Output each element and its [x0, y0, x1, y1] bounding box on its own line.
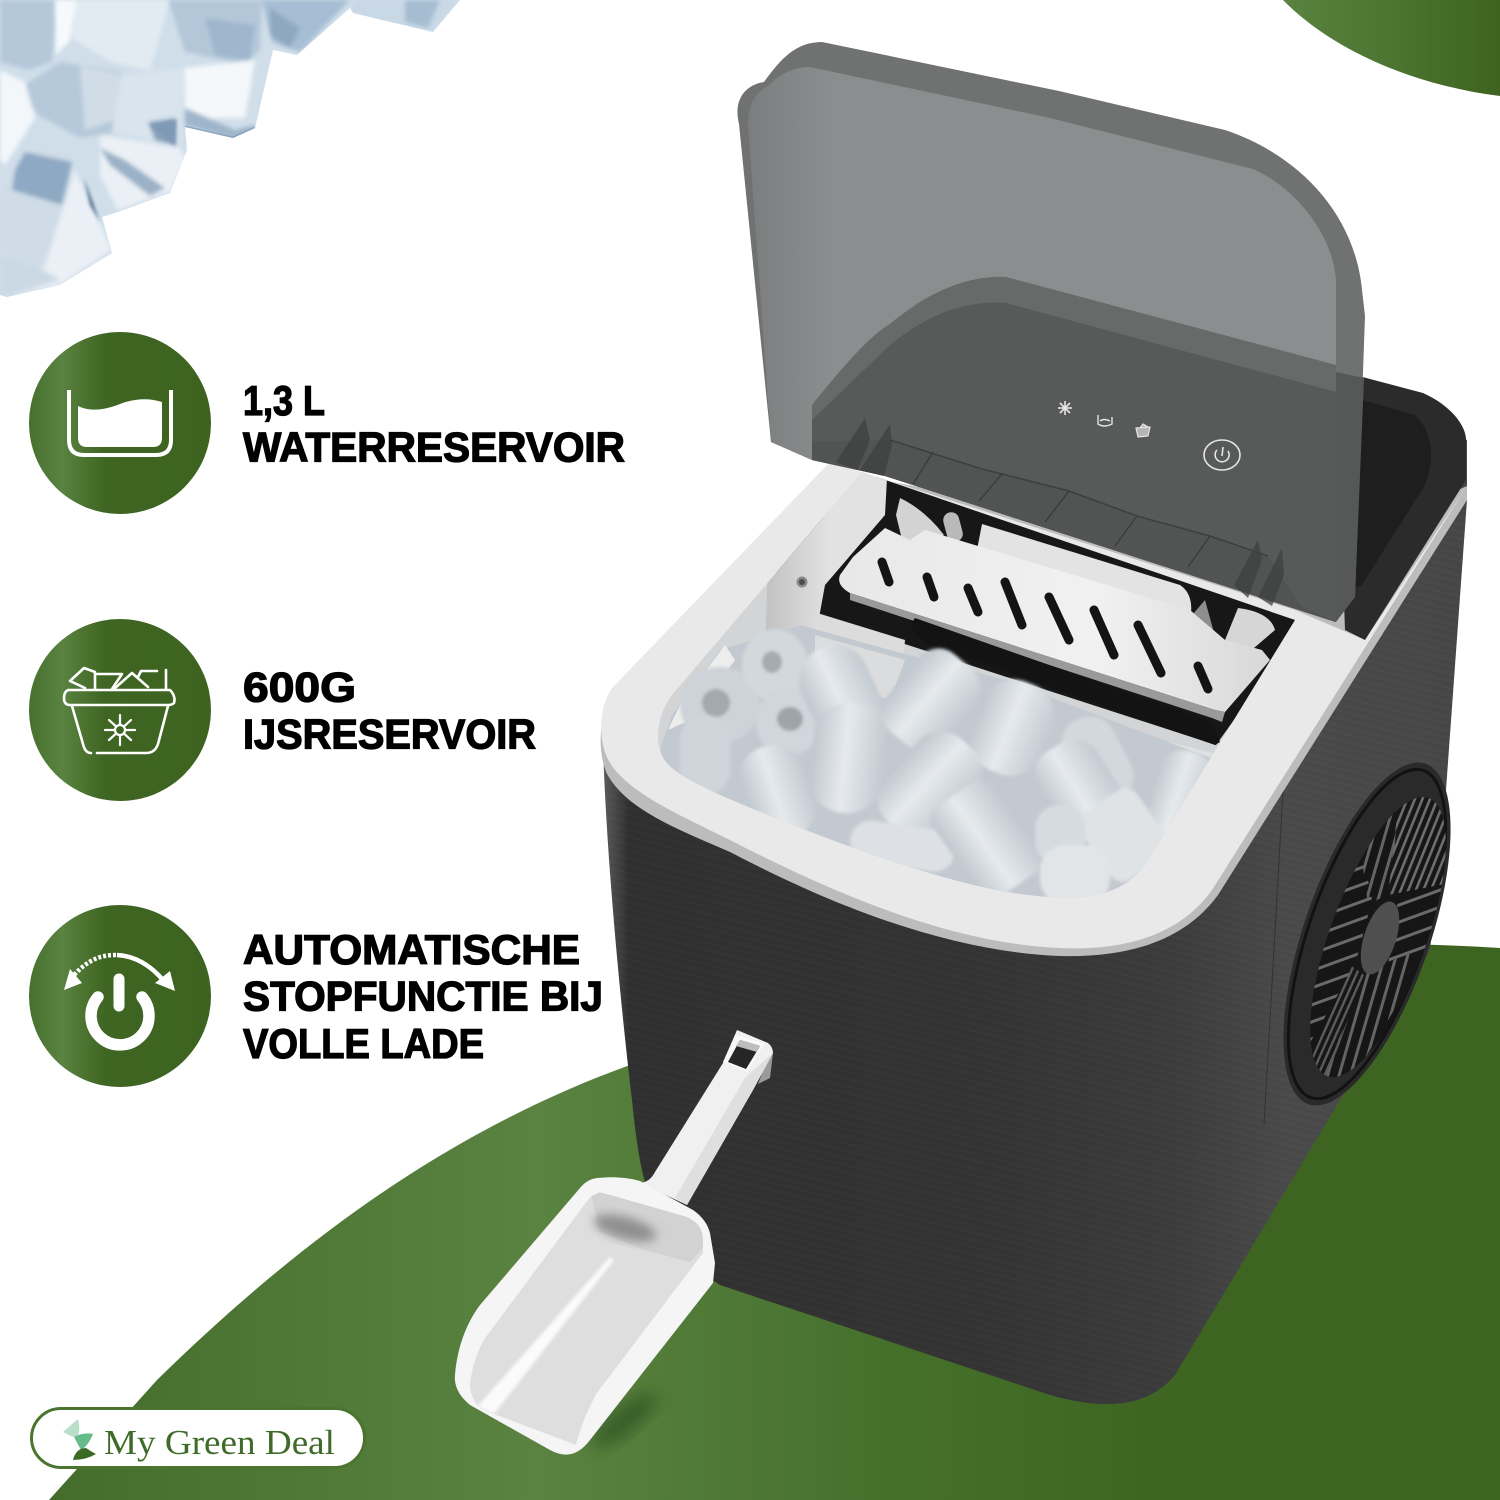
feature 2: ice reservoir	[29, 619, 536, 801]
scoop shaded corner	[591, 1209, 659, 1247]
upper right grille sector	[1389, 797, 1446, 894]
brand logo pill	[32, 1408, 364, 1468]
right grille sector	[1388, 888, 1442, 962]
icon: power with arrows	[29, 905, 211, 1087]
scoop handle	[640, 1030, 773, 1205]
dark bar under plate	[912, 618, 1220, 745]
text: 1,3 L waterreservoir: WATERRESERVOIR	[243, 424, 625, 470]
scoop ridge highlight	[477, 1257, 614, 1414]
text: 1,3 L waterreservoir: 1,3 L	[243, 377, 325, 424]
lid outer band	[737, 42, 1365, 622]
green corner arc top right	[1283, 0, 1500, 96]
text: automatische stopfunctie bij volle lade: VOLLE LADE	[243, 1020, 484, 1067]
ice ejector plate	[839, 498, 1275, 745]
hinge skirt of the lid	[812, 418, 1336, 622]
icon: ice indicator	[1136, 424, 1150, 437]
scoop shadow	[587, 1385, 663, 1455]
icon: water tank	[29, 332, 211, 514]
text: automatische stopfunctie bij volle lade: STOPFUNCTIE BIJ	[243, 972, 603, 1020]
upper grille sector	[1363, 815, 1396, 902]
text: 1,3 L waterreservoir	[243, 377, 625, 470]
white rim of the top opening	[601, 462, 1467, 948]
text: brand name: My Green Deal	[104, 1423, 335, 1462]
left grille sector	[1310, 865, 1372, 1041]
feature 1: water reservoir	[29, 332, 625, 514]
icon: leaf logo	[63, 1419, 96, 1460]
control panel seen through lid	[812, 277, 1336, 622]
icon: ice basket	[29, 619, 211, 801]
ice scoop	[455, 1030, 773, 1455]
diagonal grille sector	[1313, 966, 1364, 1076]
machine body	[603, 375, 1467, 1404]
text: automatische stopfunctie bij volle lade: AUTOMATISCHE	[243, 926, 580, 973]
scoop bowl outer	[455, 1177, 715, 1455]
lid clear interior	[748, 67, 1336, 622]
lower grille sector	[1326, 954, 1410, 1077]
icon: water indicator	[1098, 415, 1112, 426]
icon: snowflake indicator	[1058, 401, 1072, 415]
text: automatische stopfunctie bij volle lade	[243, 926, 603, 1067]
black top deck behind lid	[1336, 370, 1466, 640]
icon: power button	[1204, 440, 1240, 470]
ice cubes top left	[0, 0, 470, 300]
ice maker machine	[601, 42, 1485, 1404]
pile of ice	[660, 625, 1221, 906]
lid side over the black deck	[1336, 372, 1364, 622]
text: 600G ijsreservoir	[243, 664, 536, 758]
fan vent on the side	[1284, 762, 1451, 1106]
green curved background bottom	[49, 944, 1500, 1500]
interior of the machine	[658, 470, 1320, 906]
rim lower lip	[601, 470, 1467, 956]
scoop back wall	[592, 1192, 703, 1262]
text: 600G ijsreservoir: IJSRESERVOIR	[243, 710, 536, 758]
text: 600G ijsreservoir: 600G	[243, 664, 356, 710]
transparent lid	[737, 42, 1365, 622]
feature 3: automatic stop	[29, 905, 603, 1087]
scoop bowl interior	[470, 1190, 710, 1445]
